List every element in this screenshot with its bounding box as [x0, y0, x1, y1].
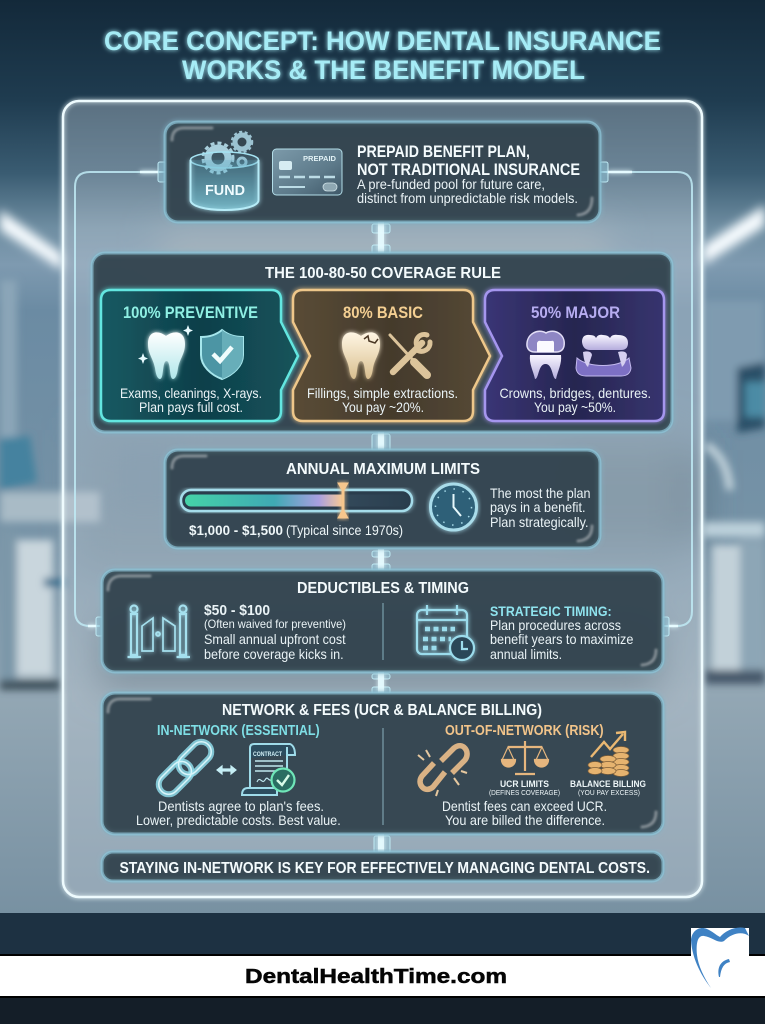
- footer band: [0, 913, 765, 1024]
- text: major description: You pay ~50%.: [534, 399, 616, 415]
- connector lines: [75, 162, 692, 853]
- text: prepaid heading: NOT TRADITIONAL INSURANCE: [357, 161, 580, 179]
- text: prepaid description: distinct from unpredictable risk models.: [357, 190, 578, 206]
- progress bar: [181, 483, 412, 518]
- icon: prepaid card: [272, 149, 342, 195]
- subheading: in-network: IN-NETWORK (ESSENTIAL): [157, 723, 320, 739]
- text: strategic timing: Plan procedures across: [490, 617, 621, 633]
- icon: crown on tooth: [527, 331, 564, 379]
- panel: annual maximum limits: [165, 450, 600, 548]
- icon: crossed tools: [390, 334, 430, 375]
- text: deductible amount: $50 - $100: [204, 603, 270, 619]
- icon: denture bridge: [576, 335, 631, 376]
- icon: white tooth with sparkles: [138, 325, 193, 379]
- panel: prepaid benefit plan: [165, 122, 600, 222]
- icon: calendar with clock: [417, 605, 474, 660]
- text: ucr limits label: (DEFINES COVERAGE): [489, 790, 560, 797]
- text: annual description: Plan strategically.: [490, 514, 588, 530]
- text: preventive description: Plan pays full cost.: [139, 399, 243, 415]
- text: deductible amount: before coverage kicks in.: [204, 646, 344, 662]
- text: out-of-network description: Dentist fees can exceed UCR.: [442, 798, 607, 814]
- text: in-network description: Dentists agree to plan's fees.: [158, 798, 324, 814]
- icon: prepaid card: PREPAID: [303, 154, 337, 163]
- icon: scales: [502, 741, 548, 774]
- icon: fund cylinder with gears: FUND: [205, 182, 245, 199]
- panel: key takeaway: STAYING IN-NETWORK IS KEY FOR EFFECTIVELY MANAGING DENTAL COSTS.: [120, 860, 650, 877]
- text: preventive description: [120, 385, 262, 415]
- text: ucr limits label: UCR LIMITS: [500, 779, 549, 790]
- icon: cracked tooth: [342, 332, 380, 379]
- icon: contract with check: CONTRACT: [253, 751, 282, 758]
- subheading: out-of-network: OUT-OF-NETWORK (RISK): [445, 723, 604, 739]
- text: basic description: Fillings, simple extractions.: [307, 385, 458, 401]
- text: balance billing label: (YOU PAY EXCESS): [578, 790, 640, 797]
- card: 80% basic: [293, 290, 490, 421]
- icon: broken chain: [418, 746, 467, 796]
- text: annual amount: $1,000 - $1,500: [189, 522, 283, 538]
- text: in-network description: Lower, predictable costs. Best value.: [136, 812, 341, 828]
- text: strategic timing: [490, 603, 634, 662]
- text: strategic timing: benefit years to maximize: [490, 631, 634, 647]
- card: 80% basic: 80% BASIC: [343, 304, 423, 322]
- icon: fund cylinder with gears: [190, 132, 258, 210]
- text: prepaid heading: [357, 143, 580, 179]
- title: WORKS & THE BENEFIT MODEL: [182, 55, 585, 85]
- text: basic description: You pay ~20%.: [342, 399, 424, 415]
- heading: network: NETWORK & FEES (UCR & BALANCE BILLING): [222, 702, 542, 719]
- text: deductible amount: (Often waived for preventive): [204, 617, 346, 631]
- text: balance billing label: BALANCE BILLING: [570, 779, 646, 790]
- text: annual description: [490, 485, 590, 530]
- icon: two-way arrow: [217, 766, 236, 774]
- text: preventive description: Exams, cleanings, X-rays.: [120, 385, 262, 401]
- text: balance billing label: [570, 779, 646, 797]
- text: deductible amount: [204, 603, 346, 662]
- text: strategic timing: STRATEGIC TIMING:: [490, 603, 612, 619]
- outer glass frame: [63, 101, 702, 897]
- panel: deductibles and timing: [102, 570, 663, 672]
- icon: clock: [430, 484, 476, 530]
- icon: gate: [128, 606, 190, 657]
- text: annual description: pays in a benefit.: [490, 499, 586, 515]
- text: prepaid description: [357, 176, 578, 206]
- icon: intact chain: [155, 738, 215, 798]
- heading: coverage rule: THE 100-80-50 COVERAGE RULE: [265, 265, 501, 282]
- text: deductible amount: Small annual upfront cost: [204, 631, 346, 647]
- card: 50% major: 50% MAJOR: [531, 304, 620, 322]
- card: 100% preventive: 100% PREVENTIVE: [123, 304, 258, 322]
- text: annual amount: [189, 522, 403, 538]
- text: major description: [500, 385, 651, 415]
- panel: network and fees: [102, 693, 663, 834]
- text: out-of-network description: [442, 798, 607, 828]
- title: CORE CONCEPT: HOW DENTAL INSURANCE: [104, 26, 661, 56]
- text: major description: Crowns, bridges, dentures.: [500, 385, 651, 401]
- card: 50% major: [485, 290, 664, 421]
- heading: deductibles: DEDUCTIBLES & TIMING: [297, 580, 469, 597]
- icon: shield with check: [201, 330, 243, 379]
- panel: key takeaway: [102, 852, 663, 881]
- text: basic description: [307, 385, 458, 415]
- text: ucr limits label: [489, 779, 560, 797]
- text: prepaid heading: PREPAID BENEFIT PLAN,: [357, 143, 530, 161]
- website url: DentalHealthTime.com: [245, 966, 507, 988]
- panel: 100-80-50 coverage rule: [92, 253, 672, 432]
- text: annual amount: (Typical since 1970s): [286, 523, 403, 538]
- icon: coins with rising arrow: [588, 732, 629, 776]
- text: strategic timing: annual limits.: [490, 646, 562, 662]
- logo: blue tooth: [691, 928, 749, 988]
- text: prepaid description: A pre-funded pool for future care,: [357, 176, 545, 192]
- text: annual description: The most the plan: [490, 485, 590, 501]
- icon: contract with check: [242, 744, 295, 795]
- heading: annual maximum: ANNUAL MAXIMUM LIMITS: [286, 461, 480, 478]
- title: [104, 26, 661, 85]
- text: in-network description: [136, 798, 341, 828]
- text: out-of-network description: You are billed the difference.: [445, 812, 605, 828]
- card: 100% preventive: [101, 290, 298, 421]
